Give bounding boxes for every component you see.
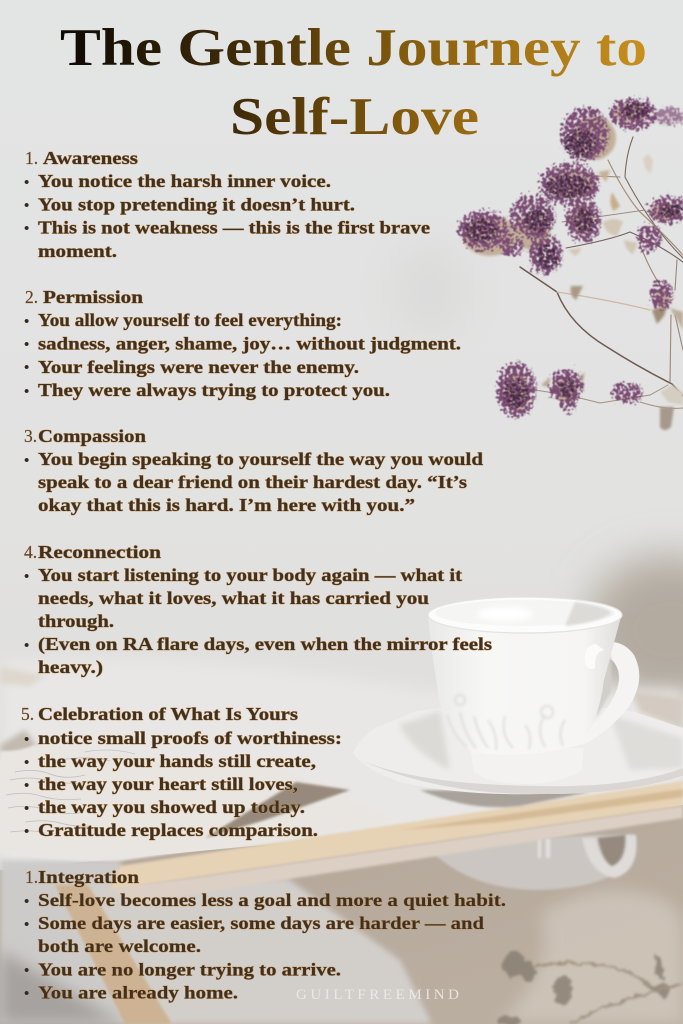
step 4: Reconnection: You start listening to your body again — what it	[38, 565, 462, 585]
step 5: Celebration of What Is Yours: •	[24, 778, 29, 794]
handwriting strokes	[6, 750, 135, 833]
step 6: Integration: both are welcome.	[38, 936, 201, 956]
step 3: Compassion: speak to a dear friend on their hardest day. “It’s	[38, 472, 467, 492]
stems	[520, 137, 683, 408]
handle top curl	[585, 644, 604, 669]
step 4: Reconnection	[24, 542, 492, 677]
step 6: Integration: Some days are easier, some days are harder — and	[38, 913, 484, 933]
step 1: Awareness: •	[24, 175, 29, 191]
step 3: Compassion: okay that this is hard. I’m here with you.”	[38, 495, 415, 515]
step 5: Celebration of What Is Yours: Gratitude replaces comparison.	[38, 820, 318, 840]
flower clusters purple	[459, 98, 683, 418]
step 5: Celebration of What Is Yours: the way your heart still loves,	[38, 774, 298, 794]
step 4: Reconnection: through.	[38, 611, 114, 631]
step 4: Reconnection: •	[24, 569, 29, 585]
step 1: Awareness: You stop pretending it doesn’t hurt.	[38, 194, 355, 214]
reflected blur highlights	[500, 890, 683, 1024]
saucer shadow	[420, 790, 590, 807]
step 2: Permission: •	[24, 314, 29, 330]
cup relief decoration	[447, 695, 565, 750]
cup interior	[435, 600, 615, 626]
step 5: Celebration of What Is Yours: the way you showed up today.	[38, 797, 305, 817]
step 5: Celebration of What Is Yours: •	[24, 755, 29, 771]
step 4: Reconnection: •	[24, 638, 29, 654]
step 5: Celebration of What Is Yours: •	[24, 801, 29, 817]
step 5: Celebration of What Is Yours: •	[24, 732, 29, 748]
cup handle	[576, 642, 639, 745]
step 2: Permission: •	[24, 384, 29, 400]
step 6: Integration: •	[24, 986, 29, 1002]
step 4: Reconnection: heavy.)	[38, 657, 103, 677]
reflected cup	[430, 835, 635, 890]
step 5: Celebration of What Is Yours: notice small proofs of worthiness:	[38, 728, 342, 748]
step 1: Awareness: •	[24, 221, 29, 237]
title: Self-Love	[230, 88, 479, 146]
step 2: Permission: sadness, anger, shame, joy… without judgment.	[38, 334, 461, 354]
step 3: Compassion: Compassion	[38, 426, 146, 446]
step 6: Integration: •	[24, 894, 29, 910]
reflected flowers	[498, 951, 683, 1024]
step 1: Awareness: •	[24, 198, 29, 214]
step 4: Reconnection: (Even on RA flare days, even when the mirror feels	[38, 634, 492, 654]
step 1: Awareness: Awareness	[43, 148, 138, 168]
step 2: Permission: They were always trying to protect you.	[38, 380, 390, 400]
step 4: Reconnection: Reconnection	[38, 542, 161, 562]
step 2: Permission: Your feelings were never the enemy.	[38, 357, 359, 377]
flower cluster tan underlayer	[463, 103, 678, 412]
cup foot	[470, 748, 584, 784]
step 5: Celebration of What Is Yours: Celebration of What Is Yours	[38, 704, 298, 724]
step 5: Celebration of What Is Yours: the way your hands still create,	[38, 751, 316, 771]
title	[60, 19, 647, 146]
step 6: Integration: •	[24, 963, 29, 979]
wood strip on left	[55, 885, 172, 1024]
cup rim	[428, 597, 622, 633]
flower dark shadows	[466, 104, 683, 410]
step 5: Celebration of What Is Yours: 5.	[21, 704, 34, 724]
step 2: Permission: •	[24, 337, 29, 353]
step 2: Permission	[24, 287, 461, 400]
step 2: Permission: Permission	[43, 287, 143, 307]
step 1: Awareness	[24, 148, 430, 261]
step 6: Integration: You are already home.	[38, 982, 238, 1002]
step 6: Integration: You are no longer trying to arrive.	[38, 960, 341, 980]
table surface	[0, 658, 683, 880]
step 4: Reconnection: 4.	[24, 542, 37, 562]
step 3: Compassion	[24, 426, 483, 515]
saucer	[353, 708, 683, 794]
step 1: Awareness: 1.	[25, 148, 38, 168]
step 2: Permission: •	[24, 360, 29, 376]
tray lower surface	[0, 805, 683, 1024]
brand watermark: GUILTFREEMIND	[296, 987, 459, 1003]
wooden tray edge	[110, 781, 683, 890]
dried flower sprig	[459, 98, 683, 430]
notepaper	[0, 745, 393, 861]
step 1: Awareness: moment.	[38, 241, 117, 261]
white teacup and saucer	[353, 597, 683, 807]
step 3: Compassion: You begin speaking to yourself the way you would	[38, 449, 483, 469]
step 6: Integration: 1.	[25, 867, 38, 887]
step 6: Integration	[24, 867, 506, 1002]
step 1: Awareness: You notice the harsh inner voice.	[38, 171, 331, 191]
book page	[85, 878, 432, 1024]
step 5: Celebration of What Is Yours: •	[24, 824, 29, 840]
step 2: Permission: You allow yourself to feel everything:	[38, 310, 342, 330]
seed leaves	[541, 154, 683, 430]
step 2: Permission: 2.	[25, 287, 38, 307]
step 6: Integration: Self-love becomes less a goal and more a quiet habit.	[38, 890, 506, 910]
step 5: Celebration of What Is Yours	[21, 704, 342, 840]
step 3: Compassion: •	[24, 453, 29, 469]
cup body	[428, 602, 622, 755]
step 3: Compassion: 3.	[24, 426, 37, 446]
step 4: Reconnection: needs, what it loves, what it has carried you	[38, 588, 429, 608]
step 6: Integration: Integration	[38, 867, 139, 887]
title: The Gentle Journey to	[60, 19, 647, 77]
step 1: Awareness: This is not weakness — this is the first brave	[38, 218, 430, 238]
step 6: Integration: •	[24, 917, 29, 933]
